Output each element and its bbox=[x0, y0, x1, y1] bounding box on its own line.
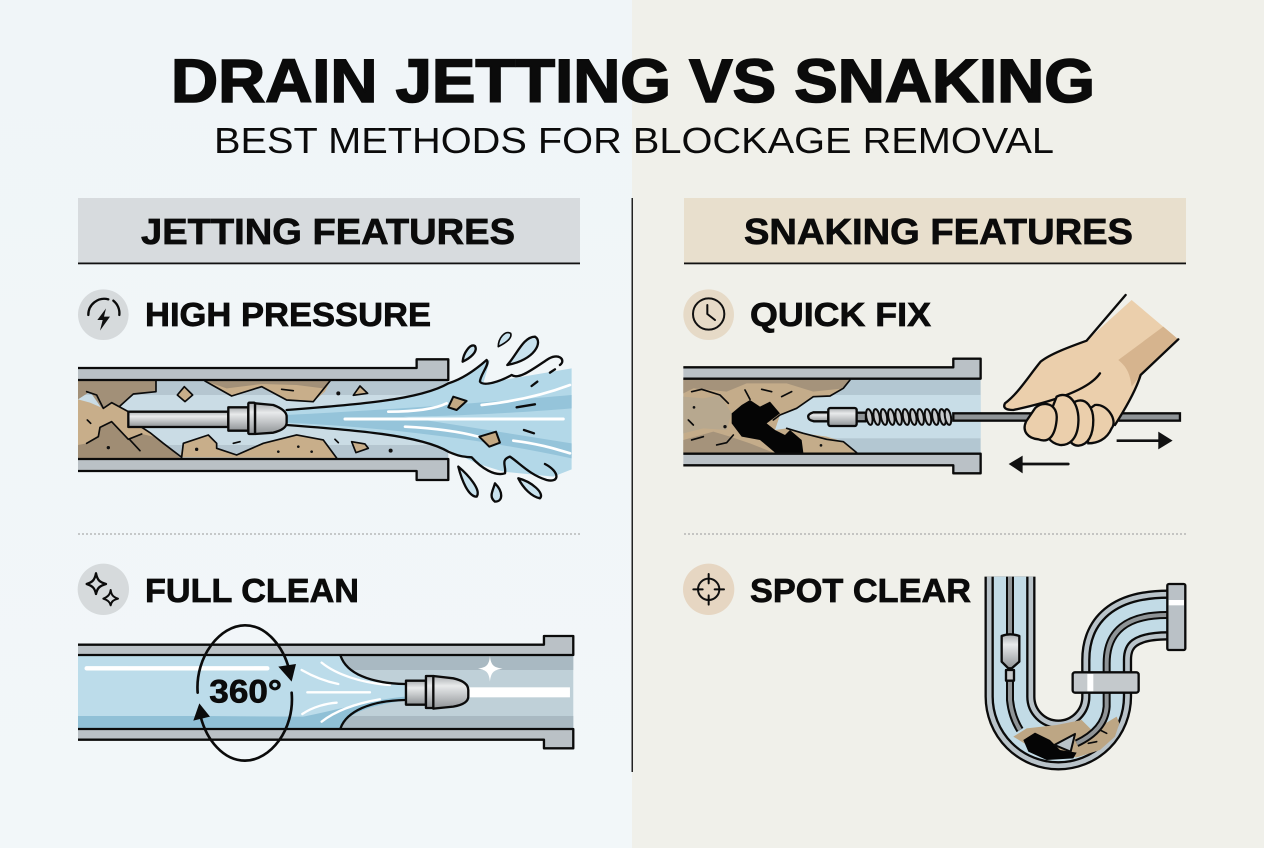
clean water bbox=[78, 655, 405, 729]
pipe interior bbox=[683, 379, 981, 454]
centre divider bbox=[632, 198, 633, 772]
cable head bbox=[1054, 734, 1075, 752]
snake cable bbox=[953, 413, 1180, 421]
title: DRAIN JETTING VS SNAKING bbox=[171, 47, 1095, 115]
direction arrows bbox=[1009, 432, 1173, 473]
debris bbox=[78, 380, 393, 459]
water spray bbox=[287, 333, 572, 502]
label: 360 degrees: 360° bbox=[209, 673, 282, 710]
illustration: clean pipe with rotating nozzle bbox=[78, 625, 573, 761]
panel background: snaking side bbox=[632, 0, 1264, 848]
sparkle bbox=[478, 656, 503, 682]
rotating nozzle bbox=[406, 676, 468, 709]
snake auger bbox=[808, 408, 952, 426]
clamp bbox=[1073, 672, 1139, 693]
label: quick fix: QUICK FIX bbox=[750, 296, 931, 333]
panel: jetting features bbox=[78, 198, 580, 761]
pipe walls bbox=[683, 359, 981, 379]
section divider bbox=[78, 533, 580, 535]
icon: crosshair target bbox=[683, 564, 734, 615]
subtitle: BEST METHODS FOR BLOCKAGE REMOVAL bbox=[214, 120, 1054, 161]
trap cable bbox=[1010, 577, 1167, 743]
droplets bbox=[463, 346, 476, 362]
water boundary bbox=[341, 656, 405, 728]
panel: snaking features bbox=[683, 198, 1186, 760]
pipe walls bbox=[78, 636, 573, 655]
pipe walls bbox=[78, 359, 448, 380]
section divider bbox=[684, 533, 1186, 535]
label: spot clear: SPOT CLEAR bbox=[750, 572, 971, 609]
icon: clock bbox=[683, 289, 734, 340]
jet nozzle bbox=[128, 403, 287, 434]
heading: snaking features: SNAKING FEATURES bbox=[744, 211, 1133, 252]
illustration: jetting pipe with high pressure spray bbox=[78, 333, 572, 502]
trap blockage bbox=[1013, 717, 1119, 760]
icon: sparkles bbox=[78, 564, 129, 615]
heading: snaking features bbox=[684, 198, 1186, 264]
panel background: jetting side bbox=[0, 0, 632, 848]
pipe interior bbox=[78, 655, 573, 729]
pipe flange bbox=[1167, 584, 1185, 650]
pipe interior bbox=[78, 380, 448, 459]
label: high pressure: HIGH PRESSURE bbox=[145, 296, 431, 333]
illustration: p-trap with snake bbox=[1002, 577, 1185, 760]
hand bbox=[1004, 295, 1178, 446]
heading: jetting features: JETTING FEATURES bbox=[141, 211, 515, 252]
icon: pressure gauge bbox=[78, 289, 129, 340]
rotation arrows bbox=[193, 625, 296, 761]
illustration: snake in pipe with hand bbox=[683, 295, 1180, 473]
label: full clean: FULL CLEAN bbox=[145, 572, 359, 609]
heading: jetting features bbox=[78, 198, 580, 264]
blockage bbox=[683, 379, 857, 453]
